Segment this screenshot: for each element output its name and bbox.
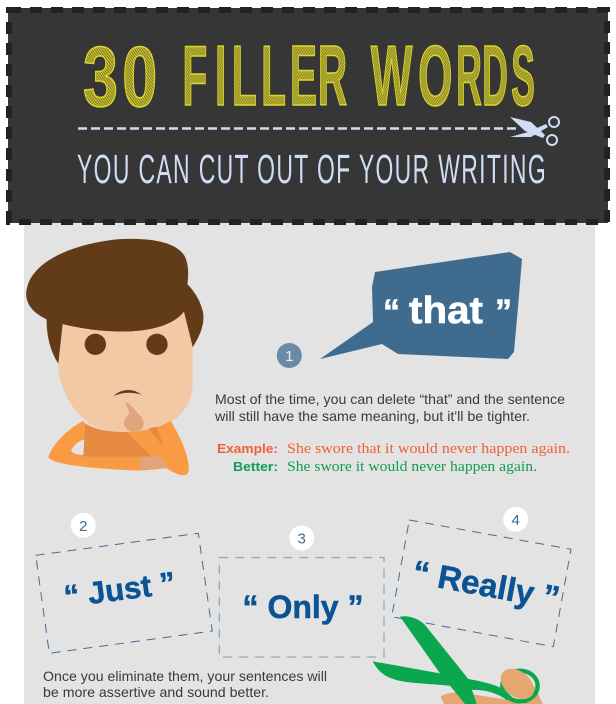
icon: scissors bbox=[510, 117, 559, 145]
closing text bbox=[43, 668, 327, 700]
hand bbox=[124, 403, 144, 432]
card 3: Only bbox=[219, 558, 384, 657]
title: 30 bbox=[83, 29, 157, 124]
dashed cut line bbox=[78, 127, 520, 130]
number badge 2 bbox=[71, 513, 96, 538]
quote word: that bbox=[409, 290, 483, 332]
sweater shade bbox=[83, 424, 152, 457]
scissors long blade bbox=[400, 616, 477, 704]
number badge 4: 4 bbox=[512, 512, 520, 529]
number badge 1: 1 bbox=[285, 348, 293, 365]
sweater bbox=[48, 421, 189, 475]
card 4: Really: “ Really ” bbox=[410, 553, 563, 616]
face bbox=[58, 312, 193, 432]
scissors ring bbox=[502, 671, 538, 701]
title: RDS bbox=[456, 28, 535, 123]
quote word: “ bbox=[383, 293, 400, 331]
example sentence: Example: bbox=[217, 442, 278, 456]
illustration: hand with green scissors bbox=[373, 616, 543, 704]
quote word bbox=[383, 290, 512, 332]
speech bubble bbox=[320, 252, 522, 359]
subtitle: YOU CAN CUT OUT OF YOUR WRITING bbox=[77, 147, 546, 193]
closing text: be more assertive and sound better. bbox=[43, 684, 269, 700]
header banner bbox=[8, 8, 608, 223]
explanation text: Most of the time, you can delete “that” and the sentence bbox=[215, 391, 565, 407]
number badge 2: 2 bbox=[79, 518, 87, 535]
closing text: Once you eliminate them, your sentences will bbox=[43, 668, 327, 684]
explanation text: will still have the same meaning, but it'll be tighter. bbox=[214, 408, 530, 424]
title bbox=[83, 28, 535, 124]
better sentence: Better: bbox=[233, 460, 278, 474]
number badge 1 bbox=[277, 343, 302, 368]
better sentence: She swore it would never happen again. bbox=[287, 459, 537, 475]
card 4: Really bbox=[392, 520, 571, 647]
card 3: Only: “ Only ” bbox=[243, 589, 363, 625]
character illustration bbox=[26, 239, 203, 475]
finger bbox=[495, 663, 540, 704]
explanation text bbox=[214, 391, 565, 424]
mouth bbox=[114, 390, 141, 396]
hair top bbox=[26, 239, 188, 331]
example sentence: She swore that it would never happen again. bbox=[287, 441, 570, 457]
background panel bbox=[24, 218, 595, 704]
title: FILLER bbox=[182, 30, 347, 124]
eyes bbox=[85, 334, 106, 355]
scissors lower blade bbox=[373, 661, 515, 700]
quote word: ” bbox=[495, 293, 512, 331]
title: WO bbox=[371, 30, 452, 124]
back hair bbox=[47, 283, 203, 364]
number badge 3 bbox=[289, 526, 314, 550]
number badge 3: 3 bbox=[298, 530, 306, 548]
card 2: Just: “ Just ” bbox=[62, 565, 177, 614]
number badge 4 bbox=[503, 507, 528, 532]
hand back bbox=[441, 693, 522, 704]
card 2: Just bbox=[36, 533, 212, 653]
